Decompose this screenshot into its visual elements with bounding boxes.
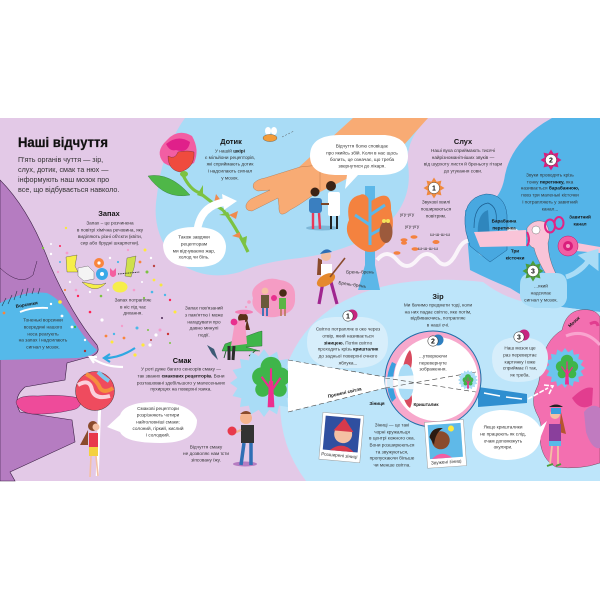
illustration: tree in brain — [545, 348, 585, 388]
badge: step 3 — [522, 260, 544, 282]
text: step 2: перевернуте — [419, 360, 447, 366]
text: breathing note — [115, 298, 152, 316]
text: step 2: зображення. — [419, 366, 447, 372]
callout: taste receptors — [107, 402, 197, 443]
text: pupils explanation: пропускаючи більше — [370, 456, 415, 460]
badge: step 3: 3 — [531, 268, 535, 276]
text: smell definition — [77, 220, 144, 246]
illustration: sound wave — [377, 229, 522, 266]
label: eardrum — [492, 218, 517, 230]
text: smell definition: Запах – це розчинена — [86, 220, 134, 226]
page background — [0, 118, 600, 481]
callout: glasses: окуляри. — [494, 444, 512, 450]
callout: pain warning: про якийсь збій. Коли в нас щось — [326, 150, 398, 156]
text: touch description: є мільйони рецепторів, — [205, 154, 255, 160]
callout: glasses — [472, 410, 547, 460]
label: guitar sounds: Брень-брень — [346, 270, 374, 274]
text: pupils explanation — [369, 422, 415, 468]
label: cochlea: канал — [573, 222, 587, 226]
callout: pain warning: звернутися до лікаря. — [338, 164, 386, 168]
label: cochlea: Завитний — [569, 214, 591, 220]
text: touch description — [205, 148, 255, 180]
illustration: tree with blue burst — [230, 349, 298, 417]
text: step 2 — [521, 172, 579, 212]
illustration: child and doctor — [306, 181, 340, 230]
callout: step 1 text: до задньої поверхні очного — [319, 354, 378, 358]
panel: step 3 box: сигнал у мозок. — [524, 298, 558, 302]
text: smell and memory: давно минулі — [190, 326, 218, 330]
illustration: girl with binoculars — [547, 404, 566, 466]
text: nose hairs note: сигнал у мозок. — [26, 344, 60, 350]
illustration: scent confetti — [3, 227, 176, 357]
intro text: слух, дотик, смак та нюх — — [18, 165, 109, 174]
illustration: bee — [263, 127, 294, 142]
text: step 2: і потрапляють у завитний — [522, 198, 578, 204]
text: spoiled food note — [183, 444, 229, 462]
illustration: brain folds — [566, 322, 600, 448]
label: three bones: кісточки — [506, 256, 525, 260]
text: step 2: ...утворюючи — [419, 354, 447, 358]
panel: smell — [2, 209, 176, 367]
illustration: woman on bench — [222, 310, 262, 360]
callout: step 1 text: отвір, який називається — [322, 332, 374, 338]
text: hearing description: від шурхоту листя й бреньоту гітари — [424, 160, 503, 166]
text: taste description: так званих смакових рецепторів. Вони — [137, 374, 225, 378]
text: step 2 — [419, 354, 447, 372]
panel: step 3 box — [520, 273, 567, 308]
photo: dilated pupils: Розширені зіниці — [321, 451, 358, 459]
callout: step 1 text — [307, 317, 388, 368]
text: nose hairs note — [19, 318, 68, 350]
heading: smell: Запах — [98, 209, 121, 218]
text: smell and memory: Запах пов'язаний — [185, 304, 223, 310]
text: step 1: повітрям. — [426, 214, 446, 218]
illustration: eyeball — [385, 331, 481, 427]
text: pupils explanation: чорні кружальця — [374, 430, 410, 434]
text: step 2: Звуки проводять крізь — [526, 172, 574, 178]
badge: step 1 — [343, 310, 358, 321]
illustration: ear anatomy — [465, 194, 600, 276]
intro text: П'ять органів чуття — зір, — [18, 155, 103, 164]
text: smell definition: в повітрі хімічна речовина, яку — [77, 228, 144, 232]
text: hearing description: найрізноманітніших звуків — — [432, 154, 495, 160]
badge: brain step 3 — [514, 330, 530, 342]
illustration: optic nerve tube — [478, 387, 527, 407]
text: sight description: відбиваючись, потрапляє — [410, 316, 466, 320]
callout: pain warning: Відчуття болю сповіщає — [336, 144, 389, 148]
callout: taste receptors: розрізняють чотири — [137, 412, 180, 418]
text: taste description — [137, 366, 226, 392]
illustration: girl with lollipop — [80, 421, 100, 477]
text: nose hairs note: всередині нашого — [24, 324, 63, 330]
label: leaf sounds — [418, 232, 450, 251]
icon: arrow to brain — [566, 252, 596, 277]
heading: touch: Дотик — [220, 137, 242, 146]
badge: step 2 — [540, 150, 562, 170]
callout: taste receptors: найголовніші смаки: — [136, 418, 180, 424]
text: sight description: в наші очі. — [427, 322, 449, 328]
text: touch description: У нашій шкірі — [215, 148, 245, 154]
text: step 1: поширюються — [421, 206, 452, 212]
label: owl sounds: угу-угу — [405, 224, 420, 229]
text: smell definition: сир або брудні шкарпетки). — [81, 240, 139, 246]
illustration: magpie — [207, 345, 218, 360]
callout: step 1 text: яблука... — [339, 360, 357, 366]
text: nose hairs note: носа реагують — [27, 332, 59, 336]
text: hearing description — [424, 147, 503, 174]
illustration: guitar player — [315, 249, 345, 304]
photo: narrowed pupils: Звужені зіниці — [431, 458, 462, 466]
text: smell and memory: нагадувати про — [187, 320, 221, 324]
callout: taste receptors: Смакові рецептори — [137, 406, 179, 411]
badge: step 2: 2 — [549, 158, 553, 164]
panel: taste — [16, 356, 257, 477]
text: step 2: називається барабанною, — [521, 184, 579, 190]
text: taste description: розташовані здебільшого у малесеньких — [137, 380, 226, 386]
callout: taste receptors: і солодкий. — [146, 432, 170, 438]
label: eardrum: перетинка — [492, 226, 516, 230]
callout: step 3 text: раз перевертає — [503, 352, 537, 358]
text: hearing description: Наші вуха сприймають тисячі — [431, 147, 495, 153]
icon: road with dashed arrow — [484, 385, 553, 399]
panel: sight background blob — [280, 280, 600, 481]
badge: step 2 — [428, 334, 444, 346]
panel: touch — [148, 127, 408, 267]
text: touch description: у мозок. — [221, 176, 239, 180]
panel: step 3 box: ...який — [534, 282, 548, 288]
illustration: face line — [0, 261, 37, 280]
panel: memory of smell — [185, 279, 295, 360]
callout: pain warning: болить, це означає, що треба — [330, 157, 395, 162]
badge: step 1 — [424, 178, 444, 198]
label: cochlea — [569, 214, 591, 226]
label: guitar sounds — [338, 270, 374, 289]
label: owl sounds — [400, 212, 420, 229]
callout: glasses: очам допоможуть — [484, 438, 523, 444]
text: pupils explanation: Зіниці — це такі — [375, 422, 409, 428]
panel: step 3 box: надсилає — [531, 290, 552, 296]
text: taste description: пухирцях на поверхні язика. — [150, 386, 212, 392]
text: step 2: повз три маленькі кісточки — [521, 192, 579, 198]
callout: step 1 text: Світло потрапляє в око через — [316, 326, 380, 332]
illustration: pointing hand — [246, 165, 320, 214]
callout: step 3 text: картинку і вже — [505, 360, 536, 364]
callout: step 3 text: як треба. — [510, 372, 530, 378]
callout: step 3 text: сприймає її так, — [503, 364, 537, 370]
label: three bones — [506, 248, 525, 260]
text: sight description: на них падає світло, яке потім, — [405, 310, 471, 314]
label: leaf sounds: ш-ш-ш-ш — [418, 246, 438, 251]
illustration: nasal cavity — [0, 292, 97, 360]
callout: pain warning — [310, 135, 408, 189]
icon: white arrow — [90, 357, 123, 367]
text: step 1 — [421, 200, 452, 218]
callout: step 3 text: Наш мозок ще — [504, 346, 536, 350]
title: Наші відчуття — [18, 134, 108, 150]
illustration: memory thought bubble — [245, 279, 295, 317]
illustration: rose — [148, 133, 248, 252]
text: spoiled food note: не дозволяє нам їсти — [183, 451, 229, 456]
text: breathing note: в ніс під час — [120, 304, 147, 310]
callout: glasses: не працюють як слід, — [480, 432, 526, 436]
text: smell and memory: події. — [198, 332, 210, 338]
text: taste description: У роті дуже багато сенсорів смаку — — [141, 366, 221, 372]
text: step 1: Звукові хвилі — [422, 200, 450, 204]
callout: heat cold pain — [163, 227, 226, 267]
callout: heat cold pain: холод чи біль. — [179, 254, 209, 260]
callout: heat cold pain: Також завдяки — [178, 234, 210, 240]
text: touch description: які сприймають дотик — [207, 160, 254, 166]
badge: step 2: 2 — [431, 338, 435, 346]
heading: hearing: Слух — [454, 137, 473, 146]
panel: touch background blob — [156, 118, 428, 275]
label: guitar sounds: Брень-брень — [338, 280, 367, 289]
panel: hearing — [315, 137, 600, 308]
icon: cilia hairs — [2, 288, 40, 306]
text: pupils explanation: в центрі кожного ока. — [369, 436, 415, 440]
illustration: head profile — [0, 180, 98, 481]
intro text — [18, 155, 119, 194]
icon: white arrow — [197, 194, 237, 232]
text: step 2: тонку перетинку, яка — [527, 180, 574, 184]
text: pupils explanation: чи менше світла. — [373, 462, 411, 468]
heading: taste: Смак — [173, 356, 192, 365]
text: pupils explanation: Вони розширюються — [370, 442, 415, 448]
photo: dilated pupils — [319, 412, 364, 463]
illustration: smelly objects — [66, 255, 140, 292]
callout: heat cold pain: ми відчуваємо жар, — [173, 248, 215, 254]
panel: sight — [230, 292, 527, 468]
text: touch description: і надсилають сигнал — [208, 168, 253, 174]
illustration: brain — [533, 310, 600, 468]
icon: lollipop — [76, 372, 114, 476]
text: smell definition: виділяють різні об'єкти (квіти, — [78, 234, 142, 239]
badge: step 1: 1 — [346, 314, 350, 320]
text: spoiled food note: зіпсовану їжу. — [191, 458, 221, 462]
panel: hearing background blob — [465, 118, 600, 312]
label: brain: Мозок — [567, 315, 581, 328]
illustration: mouth and tongue — [16, 395, 81, 414]
callout: taste receptors: солоний, гіркий, кислий — [133, 425, 184, 431]
text: sight description: Ми бачимо предмети тоді, коли — [404, 302, 472, 308]
badge: step 1: 1 — [432, 186, 436, 192]
label: three bones: Три — [511, 248, 519, 254]
text: breathing note: дихання. — [123, 310, 143, 316]
label: leaf sounds: ш-ш-ш-ш — [430, 232, 450, 237]
text: sight description — [404, 302, 472, 328]
text: step 2: канал... — [542, 206, 558, 212]
text: spoiled food note: Відчуття смаку — [190, 444, 223, 450]
label: owl sounds: угу-угу — [400, 212, 415, 217]
illustration: falling leaves — [394, 235, 440, 255]
text: nose hairs note: Тоненькі ворсинки — [23, 318, 63, 322]
text: pupils explanation: та звужуються, — [376, 450, 408, 454]
text: hearing description: до угукання сови. — [444, 168, 482, 174]
callout: heat cold pain: рецепторам — [181, 242, 207, 246]
illustration: light beam — [288, 360, 385, 412]
callout: step 3 text — [492, 337, 548, 382]
photo: narrowed pupils — [424, 420, 467, 468]
label: cilia: Ворсинки — [15, 300, 38, 309]
callout: step 1 text: зіницею. Потім світло — [324, 340, 373, 346]
icon: blue arrow — [104, 348, 135, 362]
text: breathing note: Запах потрапляє — [115, 298, 152, 302]
text: smell and memory — [185, 304, 224, 338]
label: lens: Кришталик — [413, 402, 439, 407]
panel: orange band — [298, 118, 428, 200]
callout: glasses: Якщо кришталики — [484, 424, 523, 430]
callout: step 1 text: проходить крізь кришталик — [318, 346, 379, 352]
intro text: інформують наш мозок про — [18, 175, 109, 184]
illustration: tree with owl — [347, 186, 393, 290]
label: eardrum: Барабанна — [492, 218, 517, 224]
intro text: все, що відбувається навколо. — [18, 185, 119, 194]
heading: sight: Зір — [432, 292, 444, 301]
label: pupil: Зіниця — [369, 401, 385, 406]
illustration: man with apple — [228, 411, 257, 466]
label: light rays: Промені світла — [327, 386, 362, 399]
text: smell and memory: з пам'яттю і може — [185, 312, 224, 318]
badge: brain step 3: 3 — [517, 334, 521, 342]
text: nose hairs note: на запах і надсилають — [19, 338, 68, 342]
icon: white arrow in nose — [20, 308, 48, 312]
